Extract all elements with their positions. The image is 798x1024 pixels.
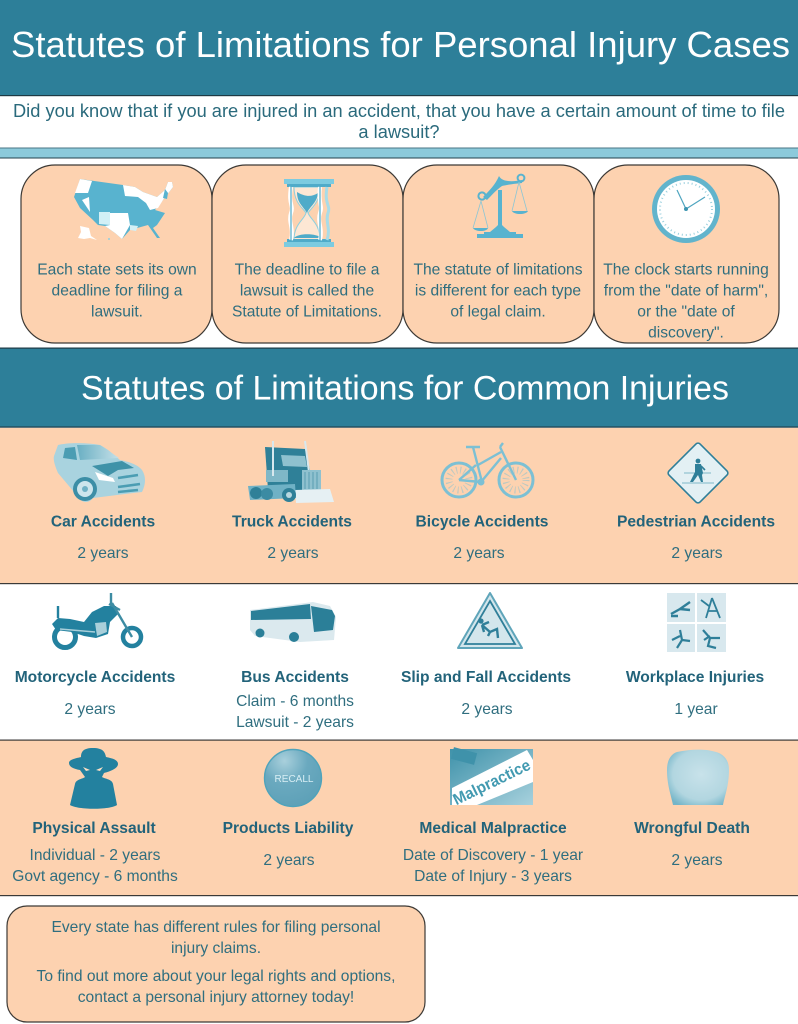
icon: recall button: RECALL — [275, 774, 314, 785]
icon: tombstone — [667, 750, 729, 805]
card text: is different for each type — [415, 282, 581, 299]
item: workplace injuries: 1 year — [674, 701, 718, 718]
item: pedestrian accidents — [617, 442, 775, 562]
item: motorcycle accidents: 2 years — [64, 701, 116, 718]
panel: closing callout: Every state has different rules for filing personal — [51, 919, 381, 936]
row divider — [0, 895, 798, 896]
item: bus accidents: Claim - 6 months — [236, 693, 354, 710]
icon: motorcycle — [52, 593, 141, 648]
panel: closing callout: contact a personal injury attorney today! — [78, 989, 354, 1006]
item: bicycle accidents: Bicycle Accidents — [416, 514, 549, 530]
card text: lawsuit. — [91, 303, 143, 320]
panel: each state card — [21, 165, 212, 343]
card text — [232, 261, 382, 320]
item: car accidents: Car Accidents — [51, 514, 155, 530]
icon: hourglass — [284, 179, 334, 247]
item: slip and fall accidents — [401, 593, 571, 718]
intro text: a lawsuit? — [358, 121, 440, 142]
icon: bus — [250, 602, 336, 642]
item: pedestrian accidents: 2 years — [671, 545, 723, 562]
icon: pedestrian sign — [667, 442, 729, 504]
light blue divider bar — [0, 148, 798, 158]
item: truck accidents: Truck Accidents — [232, 514, 352, 530]
item: physical assault: Physical Assault — [32, 820, 156, 837]
panel: deadline card — [212, 165, 403, 343]
item: bus accidents — [236, 602, 354, 731]
section banner: Statutes of Limitations for Common Injuries — [81, 370, 729, 408]
item: car accidents: 2 years — [77, 545, 129, 562]
intro text — [13, 100, 785, 142]
item: slip and fall accidents: 2 years — [461, 701, 513, 718]
panel: clock card — [594, 165, 779, 343]
item: workplace injuries: Workplace Injuries — [626, 669, 765, 686]
card text: Statute of Limitations. — [232, 303, 382, 320]
icon: car — [54, 443, 145, 502]
item: bus accidents: Lawsuit - 2 years — [236, 714, 354, 731]
panel: row 3 background — [0, 740, 798, 895]
icon: workplace hazard pictograms — [667, 593, 726, 652]
item: motorcycle accidents: Motorcycle Accidents — [15, 669, 176, 686]
panel: closing callout: To find out more about your legal rights and options, — [37, 968, 395, 985]
item: pedestrian accidents: Pedestrian Accidents — [617, 514, 775, 530]
item: wrongful death: 2 years — [671, 852, 723, 869]
item: physical assault: Individual - 2 years — [30, 847, 161, 864]
item: truck accidents: 2 years — [267, 545, 319, 562]
card text: from the "date of harm", — [604, 282, 768, 299]
icon: malpractice document: Malpractice — [451, 757, 534, 809]
icon: bicycle — [442, 443, 533, 497]
item: products liability: 2 years — [263, 852, 315, 869]
card text: discovery". — [648, 324, 724, 341]
icon: US map — [74, 179, 173, 240]
item: physical assault: Govt agency - 6 months — [12, 868, 178, 885]
title banner — [0, 0, 798, 96]
item: wrongful death: Wrongful Death — [634, 820, 750, 837]
item: medical malpractice: Date of Discovery - 1 year — [403, 847, 583, 864]
item: workplace injuries — [626, 593, 765, 718]
icon: scales of justice — [473, 175, 528, 238]
section banner — [0, 348, 798, 428]
item: car accidents — [51, 443, 155, 562]
item: bicycle accidents: 2 years — [453, 545, 505, 562]
item: wrongful death — [634, 750, 750, 869]
panel: legal claim card — [403, 165, 594, 343]
item: products liability — [223, 750, 354, 869]
item: medical malpractice: Date of Injury - 3 years — [414, 868, 572, 885]
panel: closing callout — [7, 906, 425, 1022]
card text: The clock starts running — [603, 261, 769, 278]
item: medical malpractice: Medical Malpractice — [419, 820, 567, 837]
title banner: Statutes of Limitations for Personal Injury Cases — [11, 24, 790, 65]
item: physical assault — [12, 748, 178, 885]
item: products liability: Products Liability — [223, 820, 354, 837]
card text: Each state sets its own — [37, 261, 197, 278]
item: motorcycle accidents — [15, 593, 176, 718]
card text: The deadline to file a — [235, 261, 380, 278]
panel: row 1 background — [0, 428, 798, 583]
card text: deadline for filing a — [52, 282, 183, 299]
row divider — [0, 740, 798, 741]
item: medical malpractice — [403, 747, 583, 885]
card text: The statute of limitations — [413, 261, 583, 278]
card text — [603, 261, 769, 341]
item: bus accidents: Bus Accidents — [241, 669, 349, 686]
icon: clock — [652, 175, 720, 243]
item: slip and fall accidents: Slip and Fall Accidents — [401, 669, 571, 686]
item: bicycle accidents — [416, 443, 549, 562]
panel: closing callout: injury claims. — [171, 940, 261, 957]
card text — [37, 261, 197, 320]
icon: slip warning triangle — [458, 593, 522, 648]
icon: hooded figure — [69, 748, 118, 809]
card text: lawsuit is called the — [240, 282, 374, 299]
item: truck accidents — [232, 441, 352, 562]
row divider — [0, 583, 798, 584]
card text — [413, 261, 583, 320]
card text: of legal claim. — [450, 303, 546, 320]
card text: or the "date of — [637, 303, 735, 320]
icon: truck — [248, 441, 334, 503]
intro text: Did you know that if you are injured in an accident, that you have a certain amount of time to file — [13, 100, 785, 121]
